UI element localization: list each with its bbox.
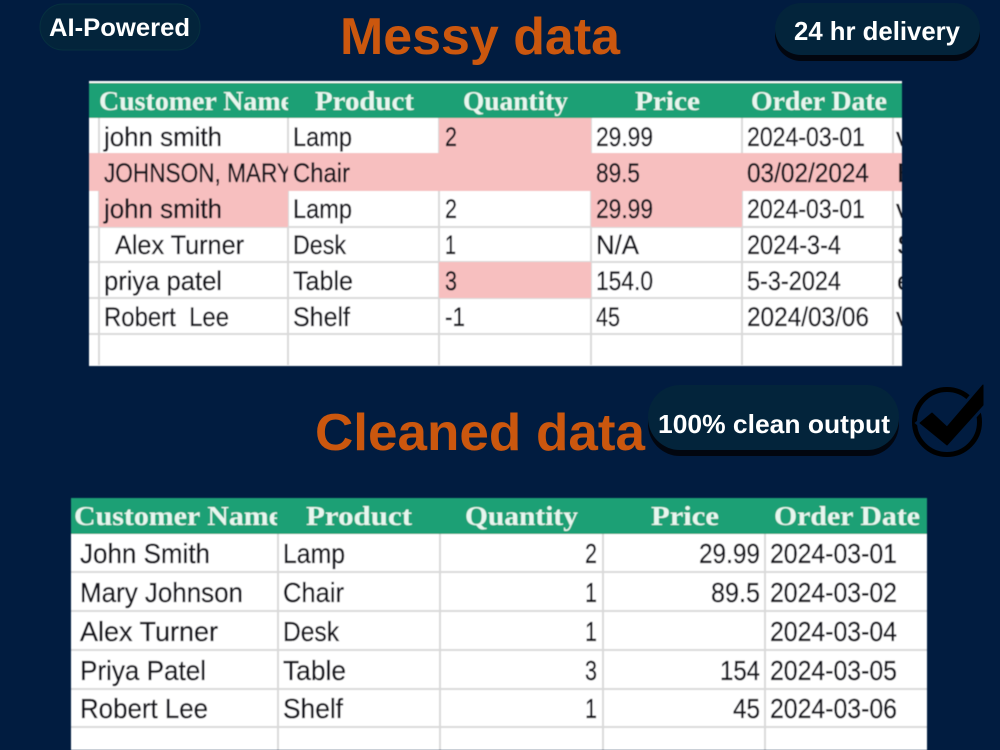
cleaned row 1: Lamp bbox=[283, 538, 345, 569]
messy row 1 bbox=[102, 126, 903, 152]
table: cleaned data bbox=[71, 498, 927, 750]
title: Messy data: Messy data bbox=[340, 8, 621, 66]
messy row 3: v bbox=[896, 194, 910, 224]
cleaned row 5 bbox=[80, 693, 897, 724]
messy row 1: Lamp bbox=[293, 122, 352, 152]
messy header row: Quantity bbox=[463, 86, 568, 116]
badge: 24 hr delivery bbox=[775, 3, 980, 61]
cleaned row 3: Alex Turner bbox=[80, 616, 218, 647]
messy row 6: -1 bbox=[445, 302, 465, 332]
messy row 6: Shelf bbox=[293, 302, 350, 332]
messy row 6: 45 bbox=[596, 302, 620, 332]
cleaned row 5: Robert Lee bbox=[80, 693, 208, 724]
messy row 3: Lamp bbox=[293, 194, 352, 224]
cleaned header row: Order Date bbox=[774, 501, 920, 531]
messy row 4: 2024-3-4 bbox=[747, 230, 841, 260]
cleaned header row: Quantity bbox=[465, 501, 579, 531]
cleaned row 2: 1 bbox=[585, 577, 597, 608]
badge: 100% clean output: 100% clean output bbox=[658, 409, 890, 439]
messy header row: Price bbox=[635, 86, 700, 116]
messy header row bbox=[89, 83, 902, 118]
cleaned row 5: 1 bbox=[585, 693, 597, 724]
messy row 2: 03/02/2024 bbox=[747, 158, 869, 188]
cleaned row 3: Desk bbox=[283, 616, 340, 647]
cleaned row 1: 29.99 bbox=[699, 538, 760, 569]
messy row 4 bbox=[114, 234, 903, 256]
title: Cleaned data: Cleaned data bbox=[315, 404, 646, 462]
cleaned row 4: 3 bbox=[585, 655, 597, 686]
messy row 6: v bbox=[896, 302, 910, 332]
cleaned row 1: John Smith bbox=[80, 538, 210, 569]
cleaned header row: Price bbox=[651, 501, 719, 531]
messy row 6: 2024/03/06 bbox=[747, 302, 869, 332]
messy row 5: e bbox=[897, 266, 912, 296]
cleaned row 3 bbox=[80, 616, 897, 647]
highlighted problem cells bbox=[89, 117, 902, 298]
messy row 3: 2024-03-01 bbox=[747, 194, 865, 224]
messy row 2: 89.5 bbox=[596, 158, 640, 188]
cleaned row 2: 89.5 bbox=[711, 577, 760, 608]
messy row 1: john smith bbox=[103, 122, 222, 152]
messy row 4: 1 bbox=[445, 230, 456, 260]
messy row 4: Alex Turner bbox=[115, 230, 244, 260]
messy row 3: 2 bbox=[445, 194, 457, 224]
messy row 1: v bbox=[896, 122, 910, 152]
messy row 5: priya patel bbox=[104, 266, 222, 296]
cleaned row 4 bbox=[80, 655, 897, 686]
messy row 5: Table bbox=[293, 266, 353, 296]
messy header row: Order Date bbox=[751, 86, 887, 116]
messy row 1: 29.99 bbox=[596, 122, 653, 152]
messy row 5: 5-3-2024 bbox=[747, 266, 841, 296]
messy row 5: 3 bbox=[445, 266, 457, 296]
cleaned row 2: 2024-03-02 bbox=[770, 577, 897, 608]
messy row 6: Robert Lee bbox=[104, 302, 229, 332]
messy row 6 bbox=[105, 306, 903, 328]
cleaned row 4: Priya Patel bbox=[80, 655, 206, 686]
messy row 2: Chair bbox=[293, 158, 350, 188]
messy row 3: john smith bbox=[103, 194, 222, 224]
badge: 100% clean output bbox=[648, 385, 899, 456]
messy row 2: E bbox=[897, 158, 915, 188]
messy row 2 bbox=[104, 162, 903, 186]
cleaned row 4: 2024-03-05 bbox=[770, 655, 897, 686]
cleaned row 5: 2024-03-06 bbox=[770, 693, 897, 724]
messy row 4: Desk bbox=[293, 230, 346, 260]
cleaned row 1 bbox=[80, 538, 897, 569]
icon: check mark in circle bbox=[914, 385, 983, 454]
cleaned row 1: 2024-03-01 bbox=[770, 538, 897, 569]
badge: AI-Powered bbox=[40, 4, 200, 50]
messy row 3: 29.99 bbox=[596, 194, 653, 224]
cleaned row 1: 2 bbox=[585, 538, 597, 569]
cleaned row 4: 154 bbox=[720, 655, 760, 686]
cleaned row 5: Shelf bbox=[283, 693, 343, 724]
cleaned header row bbox=[71, 498, 927, 534]
table: messy data bbox=[89, 81, 915, 366]
messy row 1: 2 bbox=[445, 122, 457, 152]
cleaned header row: Product bbox=[306, 501, 412, 531]
cleaned row 3: 2024-03-04 bbox=[770, 616, 897, 647]
badge: 24 hr delivery: 24 hr delivery bbox=[794, 16, 961, 46]
messy row 5: 154.0 bbox=[596, 266, 653, 296]
messy header row: Product bbox=[315, 86, 414, 116]
messy row 5 bbox=[104, 270, 903, 296]
messy row 4: N/A bbox=[596, 230, 639, 260]
cleaned row 4: Table bbox=[283, 655, 346, 686]
messy row 3 bbox=[102, 198, 903, 224]
cleaned row 5: 45 bbox=[733, 693, 760, 724]
cleaned row 2: Mary Johnson bbox=[80, 577, 243, 608]
cleaned header row: Customer Name bbox=[74, 501, 282, 531]
cleaned row 3: 1 bbox=[585, 616, 597, 647]
messy row 4: S bbox=[897, 230, 915, 260]
cleaned row 2 bbox=[80, 577, 897, 608]
messy header row: Customer Name bbox=[99, 86, 293, 116]
messy row 1: 2024-03-01 bbox=[747, 122, 865, 152]
cleaned row 2: Chair bbox=[283, 577, 344, 608]
messy row 2: JOHNSON, MARY bbox=[104, 158, 292, 188]
badge: AI-Powered: AI-Powered bbox=[49, 14, 190, 42]
